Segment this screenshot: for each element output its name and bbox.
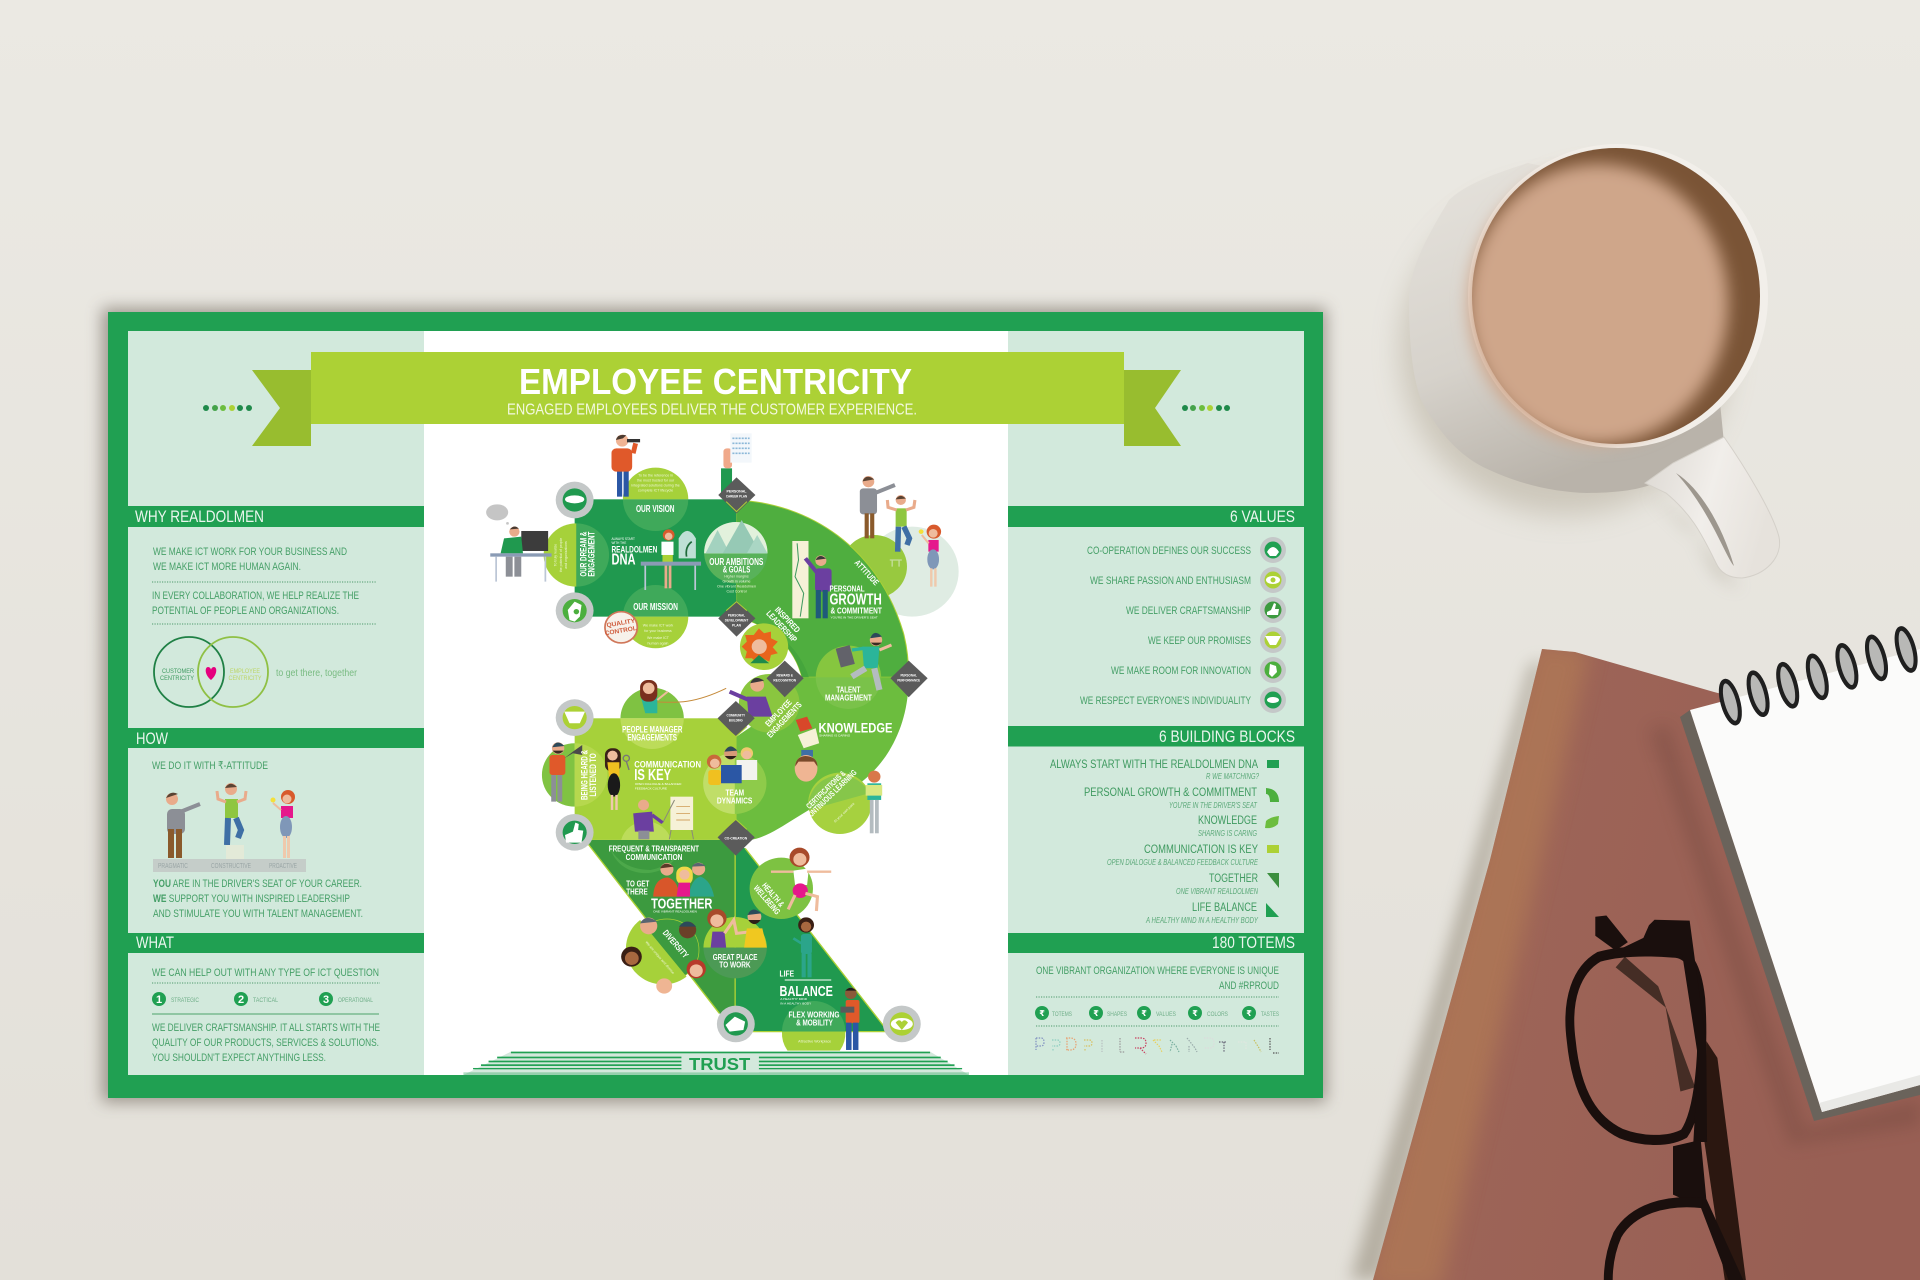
labels: upper diagram text: DYNAMICS (717, 796, 752, 806)
labels: upper diagram text: ALWAYS START (611, 537, 635, 541)
labels: lower diagram text: FREQUENT & TRANSPARENT (609, 844, 699, 854)
section: 6 building blocks: YOU'RE IN THE DRIVER'S SEAT (1169, 801, 1258, 810)
labels: lower diagram text: Attractive Workplace (798, 1039, 831, 1043)
stamp: quality control: CONTROL (604, 625, 637, 637)
labels: upper diagram text: COMMUNICATION (634, 760, 701, 771)
section: why realdolmen: IN EVERY COLLABORATION, WE HELP REALIZE THE (152, 590, 359, 602)
labels: lower diagram text: HEALTH & (760, 881, 787, 909)
diamond: community building: BUILDING (729, 718, 743, 722)
labels: upper diagram text: the potential of people (559, 538, 563, 572)
labels: upper diagram text: EMPLOYEE (763, 697, 794, 729)
section: 6 building blocks: COMMUNICATION IS KEY (1144, 844, 1258, 856)
section: 6 values: WE SHARE PASSION AND ENTHUSIASM (1090, 575, 1251, 587)
labels: upper diagram text: GROWTH (830, 592, 882, 608)
figure: certificate woman (866, 771, 882, 833)
section: 6 values: 6 VALUES (1230, 508, 1295, 526)
section: how: AND STIMULATE YOU WITH TALENT MANAGEMENT. (153, 908, 363, 920)
section: 6 building blocks: 6 BUILDING BLOCKS (1159, 728, 1295, 746)
stamp: quality control (604, 612, 637, 643)
labels: upper diagram text: FEEDBACK CULTURE (635, 786, 667, 790)
section: how: WE DO IT WITH ₹-ATTITUDE (152, 760, 268, 772)
diamond: personal career plan: CAREER PLAN (726, 494, 748, 498)
labels: lower diagram text: WELLBEING (752, 883, 783, 917)
section: how: YOU ARE IN THE DRIVER'S SEAT OF YOUR CAREER. (153, 878, 362, 890)
attitude figures (153, 783, 306, 872)
labels: upper diagram text: OUR DREAM & (579, 531, 589, 577)
labels: upper diagram text: ENGAGEMENTS (627, 733, 677, 743)
bubble: inspired leadership (740, 623, 788, 670)
figure: man with tablet (841, 988, 859, 1050)
diamond: co-creation: CO-CREATION (724, 836, 748, 840)
section: what (128, 933, 424, 1064)
diamond: reward and recognition (766, 661, 804, 697)
labels: upper diagram text: ENGAGEMENTS (765, 700, 804, 739)
block: together (585, 840, 737, 1032)
figure: knowledge head and book (795, 717, 819, 782)
labels: upper diagram text: OUR MISSION (633, 602, 678, 613)
section: how: CONSTRUCTIVE (211, 863, 251, 870)
section: 6 building blocks: KNOWLEDGE (1198, 815, 1257, 827)
rupee diagram upper part (486, 433, 959, 840)
section: how: PRAGMATIC (158, 863, 188, 870)
bubble: frequent communication (609, 840, 681, 873)
trust staircase (463, 1052, 969, 1075)
labels: upper diagram text: KNOWLEDGE (818, 721, 893, 736)
diamond: personal development plan: PLAN (732, 623, 741, 627)
panel: centre white column (424, 331, 1008, 1075)
labels: upper diagram text: One vibrant Realdolmen (717, 584, 756, 588)
venn diagram: EMPLOYEE (230, 668, 261, 675)
section: 6 building blocks: LIFE BALANCE (1192, 902, 1257, 914)
labels: upper diagram text: PEOPLE MANAGER (622, 725, 683, 735)
icon: ok hand circle (556, 592, 594, 629)
section: what: WE DELIVER CRAFTSMANSHIP. IT ALL STARTS WITH THE (152, 1022, 380, 1034)
section: 180 totems: SHAPES (1107, 1011, 1128, 1018)
labels: lower diagram text: ONE VIBRANT REALDOLMEN (653, 909, 697, 913)
section: how: PROACTIVE (269, 863, 297, 870)
section: why realdolmen: POTENTIAL OF PEOPLE AND ORGANIZATIONS. (152, 605, 339, 617)
bubble: ambitions (704, 520, 768, 583)
block icons (1265, 760, 1279, 917)
diamond: personal performance: PERSONAL (900, 674, 918, 678)
icon: hands circle (556, 482, 594, 518)
section: 180 totems: ₹ (1093, 1009, 1099, 1018)
section: 6 building blocks: SHARING IS CARING (1198, 829, 1257, 838)
labels: upper diagram text: MANAGEMENT (825, 692, 872, 702)
diamond: reward and recognition: REWARD & (776, 674, 793, 678)
section: 6 values: CO-OPERATION DEFINES OUR SUCCESS (1087, 545, 1251, 557)
labels: upper diagram text: We make ICT work (643, 624, 673, 628)
section: 180 totems: TASTES (1261, 1011, 1279, 1018)
section: what: QUALITY OF OUR PRODUCTS, SERVICES & SOLUTIONS. (152, 1037, 379, 1049)
section: why realdolmen: WE MAKE ICT MORE HUMAN AGAIN. (153, 561, 301, 573)
section: what: 2 (238, 994, 244, 1006)
figure: people manager woman (640, 680, 668, 713)
banner left tail (252, 370, 311, 446)
section: what: OPERATIONAL (338, 997, 373, 1004)
section: why realdolmen: WHY REALDOLMEN (135, 508, 264, 526)
labels: upper diagram text: To truly realize (554, 544, 558, 566)
labels: upper diagram text: Cost Control (726, 589, 747, 593)
bubble: flex working (782, 1001, 845, 1051)
labels: lower diagram text: We are unique and diverse (644, 940, 675, 975)
figure: desk dreamer (486, 504, 552, 582)
dots right (1182, 405, 1230, 411)
labels: upper diagram text: YOU'RE IN THE DRIVER'S SEAT (831, 615, 878, 619)
labels: lower diagram text: GREAT PLACE (713, 952, 758, 962)
icon: handshake circle (556, 699, 594, 736)
bubble: presenter (621, 821, 671, 840)
labels: upper diagram text: ATTITUDE (853, 558, 881, 587)
diamond: co-creation (718, 819, 755, 856)
section: 6 building blocks: ONE VIBRANT REALDOLMEN (1176, 887, 1258, 896)
section: 6 values: WE MAKE ROOM FOR INNOVATION (1111, 665, 1251, 677)
section: 180 totems (1008, 933, 1304, 1054)
section: 180 totems: AND #RPROUD (1219, 980, 1279, 992)
diamond: personal career plan (718, 477, 755, 513)
block: employee engagement bubble (739, 674, 800, 733)
labels: lower diagram text: & MOBILITY (796, 1018, 833, 1028)
section: 6 building blocks: PERSONAL GROWTH & COMMITMENT (1084, 787, 1257, 799)
labels: upper diagram text: OPEN DIALOGUE & BALANCED (635, 782, 682, 786)
section: 6 values: WE DELIVER CRAFTSMANSHIP (1126, 605, 1251, 617)
labels: upper diagram text: CONTINUOUS LEARNING (804, 768, 859, 822)
section: 6 building blocks (1008, 726, 1304, 925)
section: what: WE CAN HELP OUT WITH ANY TYPE OF ICT QUESTION (152, 967, 379, 979)
labels: upper diagram text: Growth in volume (722, 579, 751, 583)
labels: lower diagram text: IN A HEALTHY BODY (780, 1001, 811, 1005)
section: 180 totems: COLORS (1207, 1011, 1229, 1018)
section: 180 totems: ₹ (1192, 1009, 1198, 1018)
diamond: community building (718, 701, 755, 737)
labels: upper diagram text: OUR AMBITIONS (709, 557, 764, 568)
figure: high five pair (707, 909, 767, 948)
diamond: personal performance (890, 661, 928, 697)
labels: upper diagram text: for your business (644, 629, 672, 633)
totem row (1036, 1038, 1279, 1054)
figure: constructive man (887, 495, 915, 567)
icon: heart hands circle (883, 1006, 921, 1042)
block: personal growth arc (737, 500, 909, 677)
dots left (203, 405, 252, 411)
labels: upper diagram text: WITH THE (611, 541, 627, 545)
figure: pragmatic man (860, 476, 895, 538)
bubble: vision (623, 468, 688, 531)
section: 180 totems: ₹ (1246, 1009, 1252, 1018)
labels: upper diagram text: REALDOLMEN (611, 545, 657, 556)
subtitle: ENGAGED EMPLOYEES DELIVER THE CUSTOMER EXPERIENCE. (507, 402, 917, 418)
labels: upper diagram text: SHARING IS CARING (819, 734, 851, 738)
value icons (1260, 537, 1286, 713)
labels: lower diagram text (609, 844, 840, 1043)
labels: lower diagram text: FLEX WORKING (789, 1010, 840, 1020)
venn diagram: CENTRICITY (160, 675, 195, 682)
labels: upper diagram text (554, 474, 893, 824)
photo prop: spiral notepad (1680, 626, 1920, 1121)
photo prop: coffee cup (1400, 144, 1780, 590)
section: what: WHAT (136, 934, 174, 952)
labels: upper diagram text: TEAM (725, 788, 744, 798)
figure: man with binoculars (611, 435, 640, 497)
figure: balancing woman (785, 917, 831, 980)
labels: upper diagram text: LISTENED TO (588, 753, 598, 797)
bubble: dream (544, 523, 609, 587)
bubble: great place to work (703, 917, 767, 978)
labels: lower diagram text: TO WORK (719, 960, 751, 970)
figure: woman with key (605, 748, 629, 810)
block: communication (575, 718, 737, 840)
labels: lower diagram text: TO GET (626, 879, 650, 889)
labels: upper diagram text: IS KEY (634, 767, 672, 784)
panel: left pale column (128, 331, 424, 1075)
labels: lower diagram text: TOGETHER (651, 897, 713, 912)
section: how: HOW (136, 730, 168, 748)
labels: upper diagram text: BEING HEARD & (580, 750, 590, 800)
labels: upper diagram text: complete ICT lifecycle (638, 489, 673, 493)
labels: upper diagram text: At your own pace (833, 802, 856, 824)
bubble: team dynamics (703, 753, 766, 814)
block: dna (575, 499, 737, 617)
section: what: YOU SHOULDN'T EXPECT ANYTHING LESS. (152, 1052, 326, 1064)
labels: upper diagram text: ENGAGEMENT (586, 531, 597, 577)
icon: handshake green circle (717, 1006, 755, 1042)
photo prop: eyeglasses (1570, 916, 1746, 1280)
section: why realdolmen: to get there, together (276, 668, 358, 679)
venn diagram: CUSTOMER (162, 668, 194, 675)
labels: lower diagram text: COMMUNICATION (626, 852, 682, 862)
block: attitude backdrop (842, 527, 959, 617)
bubble: being heard (542, 743, 607, 807)
figure: megaphone man (550, 742, 582, 802)
section: what: 3 (323, 994, 329, 1006)
labels: lower diagram text: DIVERSITY (661, 928, 691, 960)
labels: upper diagram text: INSPIRED (773, 605, 803, 635)
section: 6 values: WE KEEP OUR PROMISES (1148, 635, 1251, 647)
section: 180 totems: ONE VIBRANT ORGANIZATION WHERE EVERYONE IS UNIQUE (1036, 965, 1279, 977)
bubble: health and wellbeing (750, 858, 813, 919)
photo prop: leather notebook (1350, 640, 1920, 1280)
icon: thumbs up circle (556, 814, 594, 851)
labels: upper diagram text: Higher margins (724, 574, 749, 578)
figure: together trio (653, 863, 714, 897)
trust label: TRUST (689, 1053, 750, 1074)
labels: lower diagram text: BALANCE (780, 984, 833, 1000)
labels: upper diagram text: and organizations (564, 541, 568, 569)
panel: right pale column (1008, 331, 1304, 1075)
figure: hand with career plan (721, 433, 752, 497)
title: EMPLOYEE CENTRICITY (519, 361, 912, 402)
block: life balance (735, 843, 888, 1032)
diamond: personal career plan: PERSONAL (727, 489, 747, 493)
diamond: personal development plan: PERSONAL (728, 614, 746, 618)
figure: growth chart and man (792, 541, 832, 618)
labels: lower diagram text: A HEALTHY MIND (780, 997, 808, 1001)
section: 6 values (1008, 506, 1304, 713)
venn diagram (154, 637, 268, 707)
figure: diversity faces (621, 918, 706, 994)
section: 180 totems: ₹ (1141, 1009, 1147, 1018)
block: inspired leadership band (737, 617, 809, 677)
labels: upper diagram text: human again (648, 641, 668, 645)
section: 180 totems: VALUES (1156, 1011, 1177, 1018)
figure: yoga woman (771, 848, 831, 911)
labels: upper diagram text: To be the reference in (638, 474, 673, 478)
section: 180 totems: ₹ (1039, 1009, 1045, 1018)
stamp: quality control: QUALITY (606, 618, 636, 629)
section: 6 building blocks: OPEN DIALOGUE & BALANCED FEEDBACK CULTURE (1107, 858, 1258, 867)
labels: upper diagram text: & GOALS (723, 565, 750, 575)
edges (585, 840, 888, 1032)
section: 6 building blocks: TOGETHER (1209, 873, 1258, 885)
section: why realdolmen (128, 506, 424, 707)
diamond: reward and recognition: RECOGNITION (773, 678, 796, 682)
rupee diagram lower part (556, 797, 921, 1051)
section: how (128, 728, 424, 920)
diamond: community building: COMMUNITY (727, 714, 746, 718)
banner (311, 352, 1124, 424)
section: 6 values: WE RESPECT EVERYONE'S INDIVIDUALITY (1080, 695, 1251, 707)
labels: lower diagram text: THERE (626, 887, 648, 897)
section: what: 1 (156, 994, 162, 1006)
figure: manager and rope (652, 678, 773, 717)
bubble: talent (816, 646, 881, 709)
section: 180 totems: 180 TOTEMS (1212, 934, 1295, 952)
bubble: mission (623, 585, 688, 648)
poster frame (108, 312, 1323, 1098)
bubble: diversity (626, 919, 699, 984)
labels: upper diagram text: We make ICT (647, 636, 670, 640)
figure: presenter and flip chart (633, 797, 693, 839)
banner right tail (1124, 370, 1181, 446)
section: 180 totems: TOTEMS (1052, 1011, 1072, 1018)
section: 6 building blocks: R WE MATCHING? (1206, 772, 1259, 781)
labels: upper diagram text: DNA (611, 552, 636, 568)
block: knowledge arc (737, 677, 909, 840)
figure: orange-haired leader (742, 628, 778, 663)
diamond: personal development plan: DEVELOPMENT (725, 618, 749, 622)
labels: upper diagram text: PERSONAL (830, 585, 865, 594)
section: how: WE SUPPORT YOU WITH INSPIRED LEADERSHIP (153, 893, 350, 905)
bubble: people manager (620, 688, 684, 749)
section: 6 building blocks: ALWAYS START WITH THE REALDOLMEN DNA (1050, 759, 1258, 771)
labels: upper diagram text: OUR VISION (636, 504, 675, 515)
figure: proactive woman (919, 525, 941, 587)
labels: upper diagram text: LEADERSHIP (764, 609, 800, 644)
section: what: STRATEGIC (171, 997, 199, 1004)
labels: upper diagram text: the most trusted for our (637, 479, 675, 483)
labels: upper diagram text: TALENT (836, 684, 861, 694)
venn diagram: CENTRICITY (228, 675, 262, 682)
labels: upper diagram text: & COMMITMENT (831, 605, 882, 615)
section: why realdolmen: WE MAKE ICT WORK FOR YOUR BUSINESS AND (153, 546, 347, 558)
diamond: personal performance: PERFORMANCE (897, 678, 921, 682)
labels: upper diagram text: CERTIFICATIONS & (804, 769, 848, 811)
section: 6 building blocks: A HEALTHY MIND IN A HEALTHY BODY (1145, 916, 1258, 925)
labels: lower diagram text: LIFE (780, 969, 794, 979)
figure: team trio (707, 746, 757, 785)
section: what: TACTICAL (253, 997, 278, 1004)
figure: runner with briefcase (836, 633, 891, 690)
poster shadow (102, 308, 1326, 1102)
figure: scientist with bell jar (641, 529, 701, 590)
diamond: personal development plan (718, 601, 755, 637)
block: certification bubble (808, 773, 872, 834)
labels: upper diagram text: integrated solutions during the (631, 484, 680, 488)
